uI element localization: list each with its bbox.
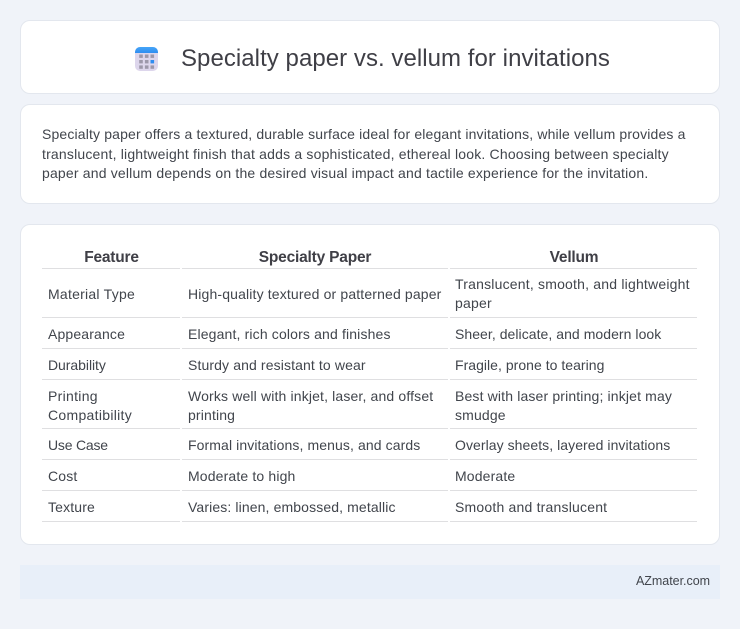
table header [84,249,598,266]
row: appearance [48,326,662,342]
header panel [20,20,720,94]
table header: Feature [84,249,139,266]
row: printing compatibility [48,388,672,423]
row: durability: Durability [48,357,106,373]
row: texture [48,499,607,515]
row: use case [48,437,670,453]
intro paragraph: Specialty paper offers a textured, durable surface ideal for elegant invitations, while vellum provides a [42,126,686,142]
row: material type: paper [455,295,492,311]
row: printing compatibility: Works well with inkjet, laser, and offset [188,388,433,404]
row: printing compatibility: Compatibility [48,407,132,423]
row: use case: Formal invitations, menus, and cards [188,437,420,453]
icon: calendar [135,47,158,71]
row: durability [48,357,604,373]
row: texture: Varies: linen, embossed, metallic [188,499,396,515]
intro paragraph: translucent, lightweight finish that adds a sophisticated, ethereal look. Choosing between specialty [42,146,669,162]
row: durability: Sturdy and resistant to wear [188,357,366,373]
footer bar [20,565,720,599]
footer credit: AZmater.com [636,574,710,588]
intro paragraph: paper and vellum depends on the desired visual impact and tactile experience for the invitation. [42,165,648,181]
row: texture: Smooth and translucent [455,499,607,515]
table header: Vellum [550,249,598,266]
row: appearance: Elegant, rich colors and finishes [188,326,391,342]
row: printing compatibility: Best with laser printing; inkjet may [455,388,672,404]
row: use case: Use Case [48,437,108,453]
row: durability: Fragile, prone to tearing [455,357,604,373]
row: printing compatibility: smudge [455,407,506,423]
row: cost: Moderate to high [188,468,295,484]
row: material type [48,276,690,311]
comparison table panel [20,224,720,545]
table header: Specialty Paper [259,249,371,266]
row: cost: Moderate [455,468,515,484]
intro paragraph [42,126,686,181]
row: printing compatibility: Printing [48,388,98,404]
row: use case: Overlay sheets, layered invitations [455,437,670,453]
row: material type: High-quality textured or patterned paper [188,286,441,302]
row: cost [48,468,515,484]
comparison table [42,249,697,522]
row: appearance: Appearance [48,326,125,342]
row: texture: Texture [48,499,95,515]
row: material type: Material Type [48,286,135,302]
title: Specialty paper vs. vellum for invitations [181,45,610,72]
row: appearance: Sheer, delicate, and modern look [455,326,661,342]
row: printing compatibility: printing [188,407,235,423]
intro text panel [20,104,720,204]
row: material type: Translucent, smooth, and lightweight [455,276,690,292]
row: cost: Cost [48,468,77,484]
